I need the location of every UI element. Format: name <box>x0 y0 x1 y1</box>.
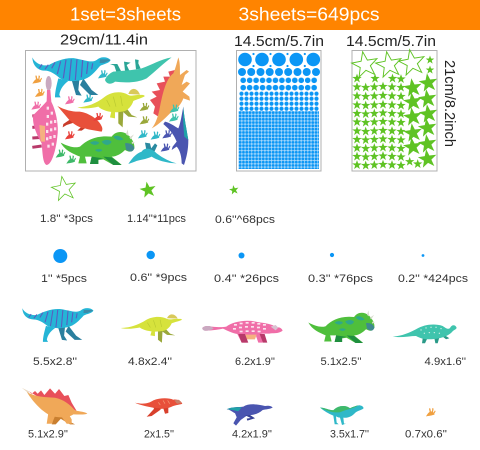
label: blue raptor size: 4.2x1.9'' <box>232 429 272 441</box>
yellow dinosaur <box>77 89 145 127</box>
label: medium star: 1.14''*11pcs <box>127 213 187 225</box>
smaller dots <box>239 91 319 111</box>
label: orange stegosaurus size: 5.1x2.9'' <box>28 429 68 441</box>
label: yellow dinosaur size: 4.8x2.4'' <box>128 356 172 368</box>
icon: 1 inch dot <box>53 249 67 263</box>
icon: 0.2 inch dot <box>422 254 424 257</box>
icon: outlined star <box>50 174 78 201</box>
icon: teal dinosaur <box>393 325 457 343</box>
heading: 1set=3sheets: 1set=3sheets <box>70 4 181 24</box>
dinosaur size row 2 <box>22 388 447 441</box>
label: footprint size: 0.7x0.6'' <box>405 429 447 441</box>
label: small star: 0.6''^68pcs <box>215 214 276 226</box>
label: teal small dinosaur size: 3.5x1.7'' <box>330 429 369 441</box>
green triceratops <box>61 129 135 165</box>
icon: orange footprint <box>426 408 436 416</box>
icon: green triceratops <box>308 310 375 343</box>
outlined stars <box>350 47 427 78</box>
footprints <box>31 70 179 164</box>
label: green triceratops size: 5.1x2.5'' <box>320 356 362 368</box>
panel: green stars sheet <box>350 47 439 171</box>
panel: dinosaur sheet <box>26 50 196 171</box>
dimension: stars sheet width: 14.5cm/5.7in <box>346 34 436 50</box>
teal dinosaur <box>105 57 172 84</box>
dimension: dots sheet width: 14.5cm/5.7in <box>234 34 324 50</box>
panel: blue dots sheet <box>236 50 321 171</box>
label: 1 inch dot: 1'' *5pcs <box>41 273 88 285</box>
label: pink ankylosaur size: 6.2x1.9'' <box>235 356 275 368</box>
label: teal dinosaur size: 4.9x1.6'' <box>424 356 466 368</box>
red dinosaur <box>57 106 102 132</box>
label: red dinosaur size: 2x1.5'' <box>144 429 174 441</box>
label: 0.3 inch dot: 0.3'' *76pcs <box>308 273 374 285</box>
icon: orange stegosaurus <box>22 388 87 424</box>
medium dots <box>238 68 320 76</box>
icon: blue hadrosaur <box>22 308 93 342</box>
icon: small star <box>228 184 239 195</box>
icon: yellow dinosaur <box>121 314 182 343</box>
tiny dot grid <box>238 111 319 169</box>
star size key <box>40 174 276 226</box>
icon: 0.3 inch dot <box>330 253 334 257</box>
blue hadrosaur <box>32 57 111 97</box>
blue raptor <box>163 107 188 165</box>
icon: blue raptor <box>227 404 273 426</box>
label: 0.2 inch dot: 0.2'' *424pcs <box>398 273 469 285</box>
large stars <box>402 56 439 168</box>
icon: 0.4 inch dot <box>238 252 244 258</box>
dot size key <box>41 249 469 285</box>
large dots <box>238 53 320 67</box>
pink ankylosaur <box>32 76 58 165</box>
dimension: sheet height: 21cm/8.2inch <box>441 60 457 147</box>
label: blue hadrosaur size: 5.5x2.8'' <box>33 356 77 368</box>
heading: 3sheets=649pcs: 3sheets=649pcs <box>238 4 380 24</box>
icon: red dinosaur <box>135 398 182 417</box>
header banner <box>0 0 480 30</box>
dinosaur size row 1 <box>22 308 466 368</box>
icon: pink ankylosaur <box>202 321 283 343</box>
small dots <box>240 77 318 91</box>
label: 0.6 inch dot: 0.6'' *9pcs <box>130 272 188 284</box>
label: outlined star: 1.8'' *3pcs <box>40 213 94 225</box>
icon: medium star <box>139 180 157 198</box>
teal small dinosaur <box>128 143 177 164</box>
icon: teal small dinosaur <box>320 405 363 425</box>
dimension: dinosaur sheet width: 29cm/11.4in <box>60 33 148 49</box>
small stars <box>352 74 422 169</box>
icon: 0.6 inch dot <box>146 251 155 259</box>
label: 0.4 inch dot: 0.4'' *26pcs <box>214 273 280 285</box>
orange stegosaurus <box>150 57 190 128</box>
